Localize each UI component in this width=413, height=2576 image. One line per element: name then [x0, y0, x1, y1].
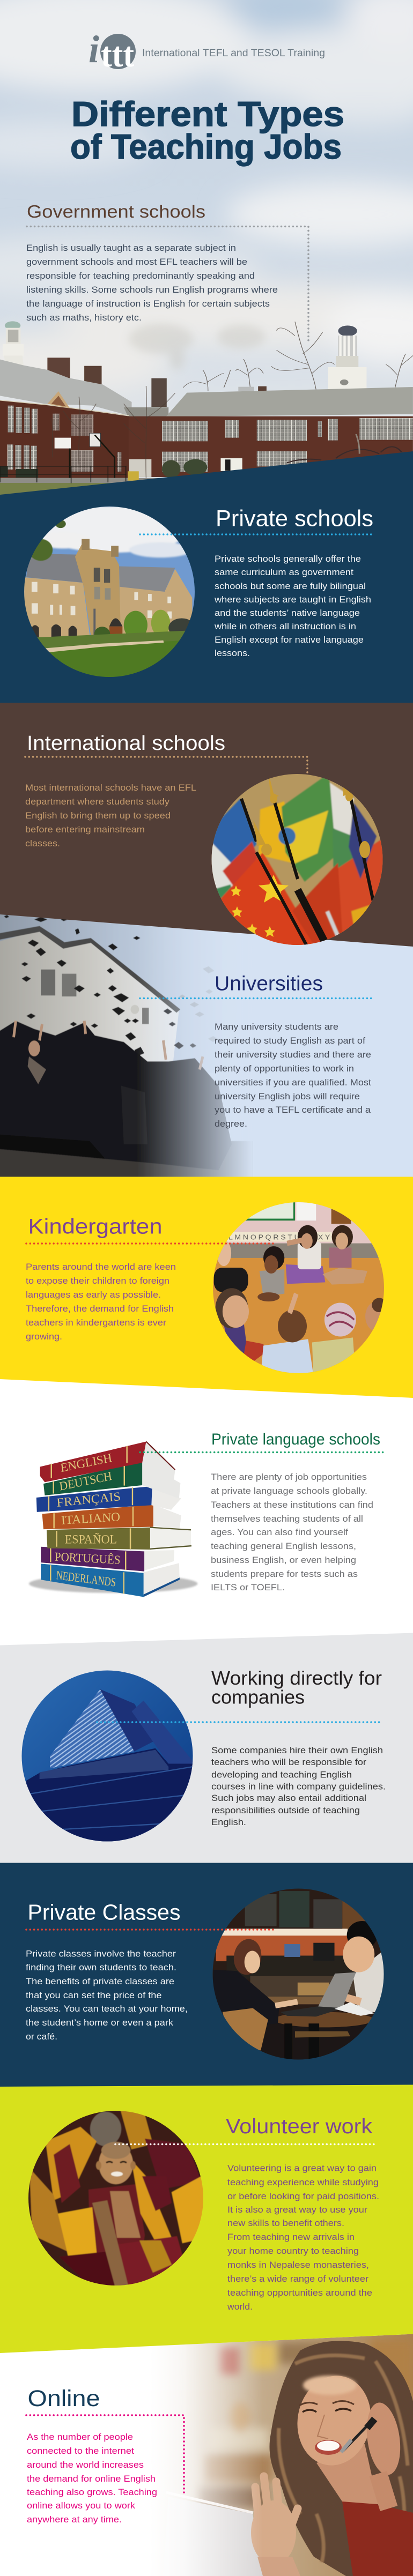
heading: Universities — [215, 972, 323, 995]
text block: finding their own students to teach. — [26, 1962, 176, 1972]
text block: English is usually taught as a separate subject in — [26, 243, 236, 253]
text block: their university studies and there are — [215, 1049, 371, 1060]
dotted connector — [140, 533, 373, 535]
walls — [0, 400, 129, 482]
books — [144, 1563, 180, 1597]
boy's face — [99, 2143, 133, 2184]
girl in white — [286, 1264, 325, 1284]
photo: cloudy sky — [0, 0, 413, 498]
dotted connector — [27, 226, 308, 343]
panel: volunteer work — [0, 2085, 413, 2353]
text block: around the world increases — [27, 2460, 144, 2470]
text block — [214, 554, 371, 658]
text block: Private classes involve the teacher — [26, 1949, 176, 1959]
text block: same curriculum as government — [215, 567, 353, 577]
panel: private language schools — [29, 1431, 385, 1597]
text block — [25, 783, 196, 848]
text block: online allows you to work — [27, 2500, 136, 2511]
panel: online — [0, 2329, 413, 2576]
photo circle: kindergarten children: L M N O P Q R S T U V W X Y — [228, 1233, 330, 1241]
text block: the student’s home or even a park — [26, 2017, 174, 2028]
child with hat — [312, 1337, 354, 1372]
text block: Parents around the world are keen — [26, 1262, 176, 1272]
illustration: stack of language books: DEUTSCH — [58, 1469, 113, 1493]
dotted connector — [26, 1242, 277, 1245]
text block: there’s a wide range of volunteer — [227, 2274, 368, 2284]
text block: Volunteering is a great way to gain — [227, 2163, 377, 2173]
heading: Kindergarten — [28, 1215, 162, 1238]
text block: teachers in kindergartens is ever — [26, 1317, 166, 1328]
text block: Some companies hire their own English — [211, 1745, 383, 1755]
text block: university English jobs will require — [215, 1091, 360, 1101]
dotted connector — [140, 997, 373, 999]
text block: universities if you are qualified. Most — [215, 1077, 371, 1088]
text block — [211, 1745, 386, 1827]
illustration: stack of language books: FRANÇAIS — [56, 1490, 121, 1510]
text block: department where students study — [25, 796, 170, 807]
illustration: stack of language books — [29, 1441, 197, 1597]
text block: new skills to benefit others. — [227, 2218, 344, 2228]
panel: working directly for companies — [0, 1633, 413, 1863]
dotted connector — [26, 1929, 277, 1931]
curly-haired child — [263, 1246, 284, 1270]
panel: international schools — [0, 703, 413, 954]
chimneys — [47, 358, 70, 379]
text block: teaching general English lessons, — [211, 1541, 356, 1551]
right tower — [338, 325, 357, 336]
crowd — [0, 1141, 253, 1178]
text block: English to bring them up to speed — [25, 810, 171, 821]
text block: schools but some are fully bilingual — [215, 581, 366, 591]
text block: world. — [227, 2302, 253, 2312]
heading: International schools — [27, 732, 225, 755]
logo: itt: ttt — [101, 35, 134, 75]
text block — [211, 1472, 373, 1592]
text block: themselves teaching students of all — [211, 1514, 363, 1524]
text block: you to have a TEFL certificate and a — [215, 1105, 371, 1115]
text block: As the number of people — [27, 2432, 133, 2442]
photo: woman teaching online with a headset — [150, 2329, 413, 2576]
heading: Private Classes — [28, 1900, 180, 1924]
text block: before entering mainstream — [25, 824, 145, 835]
text block — [26, 1262, 176, 1342]
photo circle: young monks — [27, 2109, 206, 2289]
text block: It is also a great way to use your — [227, 2205, 367, 2215]
text block: required to study English as part of — [215, 1036, 365, 1046]
boy in purple — [224, 1324, 246, 1354]
front trees — [51, 386, 175, 479]
panel: private classes — [0, 1863, 413, 2088]
text block: responsible for teaching predominantly speaking and — [26, 271, 255, 281]
text block: There are plenty of job opportunities — [211, 1472, 367, 1482]
text block — [27, 2432, 157, 2525]
heading: Working directly for — [211, 1667, 382, 1689]
illustration: stack of language books: ENGLISH — [60, 1450, 113, 1475]
laptop — [318, 1972, 356, 2008]
text block: Most international schools have an EFL — [25, 783, 196, 793]
text block: while in others all instruction is in — [214, 621, 356, 631]
text block: English except for native language — [215, 635, 364, 645]
heading: Private language schools — [211, 1431, 380, 1448]
text block: languages as early as possible. — [26, 1290, 161, 1300]
man — [353, 1950, 387, 2013]
playground — [287, 446, 402, 463]
text block: monks in Nepalese monasteries, — [227, 2260, 369, 2270]
roofs — [0, 360, 132, 416]
text block: degree. — [215, 1119, 247, 1129]
text block — [227, 2163, 379, 2312]
dotted connector — [97, 1721, 382, 1723]
illustration: stack of language books: ESPAÑOL — [65, 1532, 117, 1546]
windows — [8, 406, 14, 433]
panel: kindergarten — [0, 1177, 413, 1398]
bands — [49, 1446, 133, 1594]
left cupola — [5, 321, 20, 330]
heading: Private schools — [216, 506, 373, 532]
heading: companies — [211, 1686, 305, 1708]
title: Different Types — [71, 94, 344, 133]
text block: teaching experience while studying — [227, 2177, 379, 2187]
text block: Many university students are — [215, 1022, 338, 1032]
illustration: stack of language books: NEDERLANDS — [56, 1568, 116, 1589]
dotted connector — [26, 2415, 184, 2496]
text block: IELTS or TOEFL. — [211, 1582, 285, 1592]
boy from behind — [261, 1339, 313, 1375]
photo circle: kindergarten children — [211, 1200, 387, 1378]
text block: and the students’ native language — [215, 608, 360, 618]
text block: such as maths, history etc. — [26, 312, 142, 323]
text block: teaching also grows. Teaching — [27, 2487, 157, 2497]
text block: developing and teaching English — [211, 1770, 352, 1780]
logo: itt — [88, 28, 136, 75]
text block — [26, 1949, 188, 2042]
dotted connector — [115, 2143, 377, 2145]
text block: The benefits of private classes are — [26, 1976, 174, 1986]
heading: government schools: Government schools — [27, 202, 205, 221]
text block: connected to the internet — [27, 2446, 134, 2456]
text block — [215, 1022, 371, 1129]
text block: ages. You can also find yourself — [211, 1527, 348, 1537]
pavement and grass — [0, 478, 163, 483]
text block: English. — [211, 1817, 246, 1827]
dotted connector — [25, 757, 307, 773]
text block: lessons. — [215, 648, 250, 658]
text block: growing. — [26, 1331, 62, 1342]
text block: classes. — [25, 838, 60, 848]
text block: where subjects are taught in English — [214, 594, 371, 605]
text block: Such jobs may also entail additional — [211, 1793, 366, 1803]
photo circle: flags — [209, 772, 386, 954]
illustration: stack of language books: ITALIANO — [61, 1510, 120, 1527]
photo circle: private school — [21, 505, 197, 681]
photo circle: office tower — [19, 1667, 196, 1847]
text block: the language of instruction is English for certain subjects — [26, 299, 270, 309]
text block: your home country to teaching — [227, 2246, 359, 2256]
panel: private schools — [0, 451, 413, 703]
text block: the demand for online English — [27, 2474, 156, 2484]
text block: business English, or even helping — [211, 1555, 356, 1565]
text block: government schools and most EFL teachers will be — [26, 257, 247, 267]
text block: classes. You can teach at your home, — [26, 2004, 188, 2014]
text block: Therefore, the demand for English — [26, 1304, 174, 1314]
text block: teachers who will be responsible for — [211, 1757, 366, 1767]
title — [70, 94, 344, 166]
heading: Online — [28, 2386, 100, 2411]
text block: teaching opportunities around the — [227, 2288, 372, 2298]
text block: Teachers at these institutions can find — [211, 1500, 373, 1510]
girl with striped top — [322, 1268, 367, 1285]
logo text: International TEFL and TESOL Training — [142, 48, 325, 59]
text block — [26, 243, 278, 323]
text block: Private schools generally offer the — [215, 554, 361, 564]
shrubs — [162, 460, 180, 478]
trees — [183, 322, 413, 391]
heading: Volunteer work — [226, 2115, 373, 2138]
logo: itt: i — [88, 28, 99, 71]
text block: at private language schools globally. — [211, 1486, 367, 1496]
text block: that you can set the price of the — [26, 1990, 162, 2000]
woman — [212, 1970, 279, 2029]
photo: red-brick school building — [0, 321, 413, 499]
text block: listening skills. Some schools run English programs where — [26, 285, 278, 295]
hoops — [55, 438, 71, 449]
dotted connector — [140, 1451, 385, 1453]
photo: graduates throwing caps — [0, 907, 253, 1178]
text block: students prepare for tests such as — [211, 1569, 358, 1579]
text block: From teaching new arrivals in — [227, 2232, 355, 2242]
text block: plenty of opportunities to work in — [215, 1063, 354, 1074]
text block: or before looking for paid positions. — [227, 2191, 379, 2201]
text block: anywhere at any time. — [27, 2514, 122, 2525]
text block: courses in line with company guidelines. — [211, 1782, 386, 1791]
heading — [211, 1667, 382, 1708]
title: of Teaching Jobs — [70, 127, 342, 166]
photo circle: cafe lesson — [211, 1887, 387, 2061]
text block: or café. — [26, 2031, 57, 2042]
text block: to expose their children to foreign — [26, 1276, 169, 1286]
panel: government schools — [0, 0, 413, 499]
text block: responsibilities outside of teaching — [211, 1805, 360, 1815]
illustration: stack of language books: PORTUGUÊS — [54, 1550, 121, 1567]
panel: universities — [0, 907, 413, 1178]
